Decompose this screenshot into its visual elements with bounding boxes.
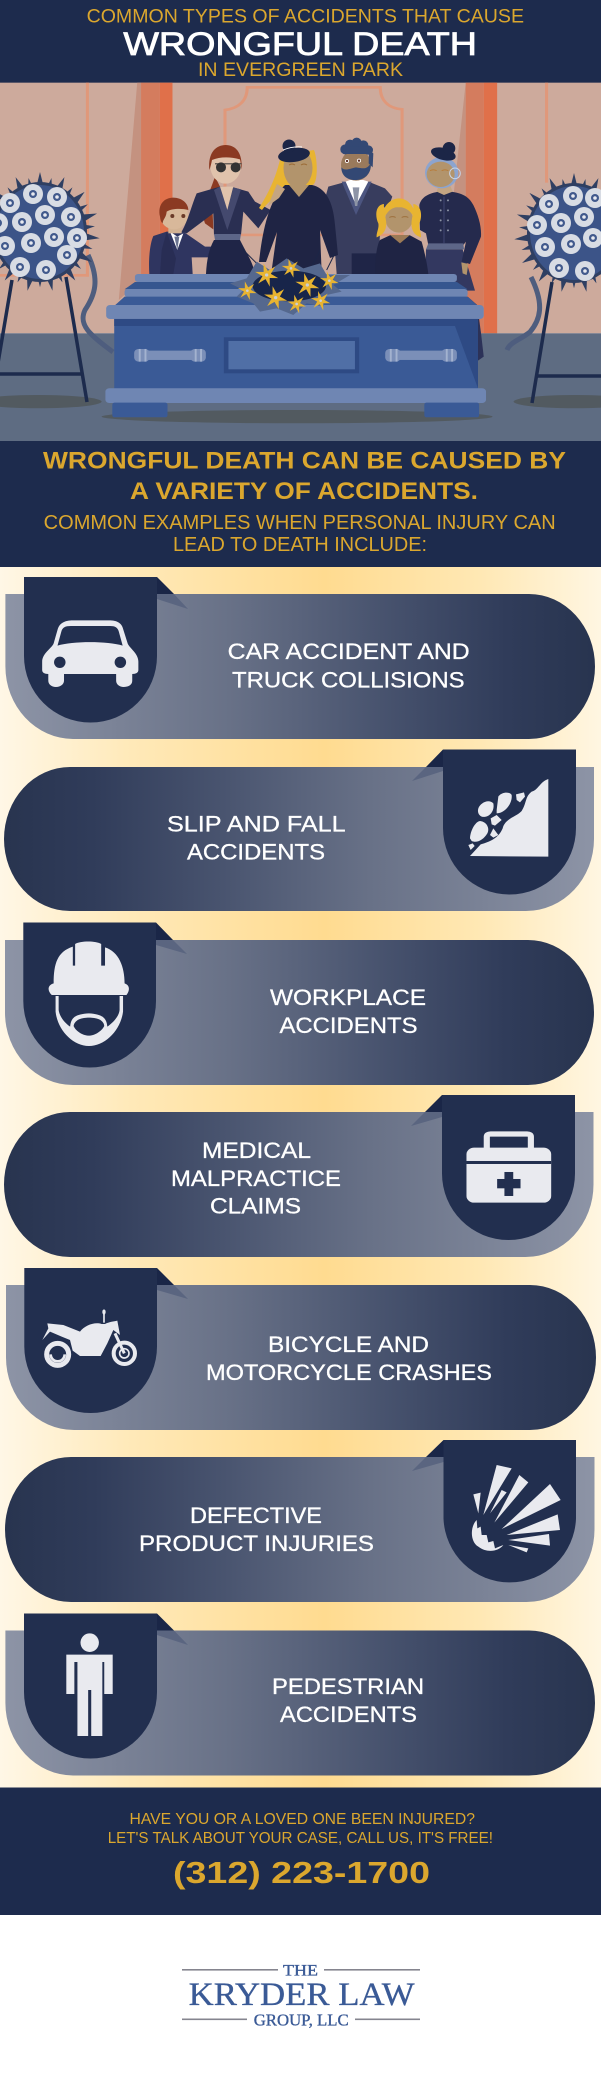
ribbon left [83, 255, 113, 352]
label: medical malpractice: MEDICAL [202, 1138, 311, 1163]
logo: the kryder law group: GROUP, LLC [254, 2011, 349, 2030]
panel: intro banner [0, 441, 601, 567]
text: have you been injured: HAVE YOU OR A LOVED ONE BEEN INJURED? [130, 1811, 475, 1828]
text: common examples line 1: COMMON EXAMPLES WHEN PERSONAL INJURY CAN [44, 512, 556, 534]
label: defective product: DEFECTIVE [190, 1503, 322, 1528]
wreath left stand [0, 277, 87, 402]
label: slip and fall [167, 812, 346, 864]
logo: the kryder law group: THE [283, 1963, 318, 1980]
wreath right stand [532, 282, 601, 403]
item: workplace [5, 922, 594, 1085]
panel: call to action [0, 1788, 601, 1915]
text: common examples line 2: LEAD TO DEATH INCLUDE: [173, 534, 427, 556]
coffin [105, 274, 486, 417]
ribbon right [507, 277, 540, 350]
item: bicycle and motorcycle [6, 1268, 596, 1430]
label: workplace [270, 985, 426, 1038]
heading: variety of accidents: A VARIETY OF ACCIDENTS. [130, 478, 478, 505]
panel: accidents background [0, 567, 601, 1788]
label: workplace: ACCIDENTS [280, 1013, 418, 1038]
room background [0, 83, 601, 442]
logo: the kryder law group: KRYDER LAW [189, 1977, 415, 2013]
person: blonde woman with hat [259, 140, 338, 282]
heading line: common types: COMMON TYPES OF ACCIDENTS THAT CAUSE [87, 7, 524, 28]
item: pedestrian [5, 1614, 595, 1776]
label: workplace: WORKPLACE [270, 985, 426, 1010]
text: talk about your case: LET'S TALK ABOUT YOUR CASE, CALL US, IT'S FREE! [108, 1830, 493, 1847]
label: pedestrian: PEDESTRIAN [272, 1674, 424, 1699]
wreath left [0, 172, 100, 292]
panel: footer white [0, 1915, 601, 2074]
logo: the kryder law group [182, 1963, 420, 2030]
item: defective product [5, 1440, 595, 1602]
illustration: funeral scene [0, 83, 601, 442]
person: woman with sunglasses [182, 145, 271, 274]
person: girl with pigtails [375, 198, 428, 274]
icon: falling rocks [468, 779, 548, 857]
label: medical malpractice: MALPRACTICE [171, 1166, 341, 1191]
icon: pedestrian [66, 1633, 113, 1736]
flower arrangement on coffin [230, 250, 350, 315]
heading line: location: IN EVERGREEN PARK [198, 60, 403, 81]
person: man with beard [320, 138, 392, 274]
title: wrongful death: WRONGFUL DEATH [123, 26, 477, 62]
label: bicycle and motorcycle [206, 1332, 492, 1385]
person: boy [149, 198, 212, 274]
label: bicycle and motorcycle: BICYCLE AND [268, 1332, 429, 1357]
icon: medical kit [466, 1134, 551, 1203]
icon: hard hat and beard [49, 941, 129, 1046]
icon: motorcycle [42, 1309, 135, 1365]
wreath right [514, 173, 601, 293]
label: pedestrian: ACCIDENTS [280, 1702, 417, 1727]
item: slip and fall [4, 750, 594, 911]
icon: explosion [472, 1465, 561, 1552]
person: older woman [419, 142, 481, 291]
label: car accident: CAR ACCIDENT AND [228, 639, 470, 664]
label: slip and fall: ACCIDENTS [187, 840, 325, 864]
label: bicycle and motorcycle: MOTORCYCLE CRASHES [206, 1360, 492, 1385]
label: slip and fall: SLIP AND FALL [167, 812, 346, 837]
label: car accident [228, 639, 470, 693]
label: defective product: PRODUCT INJURIES [139, 1531, 374, 1556]
label: medical malpractice: CLAIMS [210, 1194, 301, 1218]
icon: car [42, 620, 138, 687]
text: phone number: (312) 223-1700 [173, 1855, 430, 1890]
heading: caused by: WRONGFUL DEATH CAN BE CAUSED BY [43, 448, 566, 475]
label: defective product [139, 1503, 374, 1556]
panel: header banner [0, 0, 601, 83]
item: car accident [5, 577, 595, 739]
label: pedestrian [272, 1674, 424, 1727]
item: medical malpractice [4, 1095, 594, 1257]
label: medical malpractice [171, 1138, 341, 1218]
label: car accident: TRUCK COLLISIONS [232, 668, 465, 693]
